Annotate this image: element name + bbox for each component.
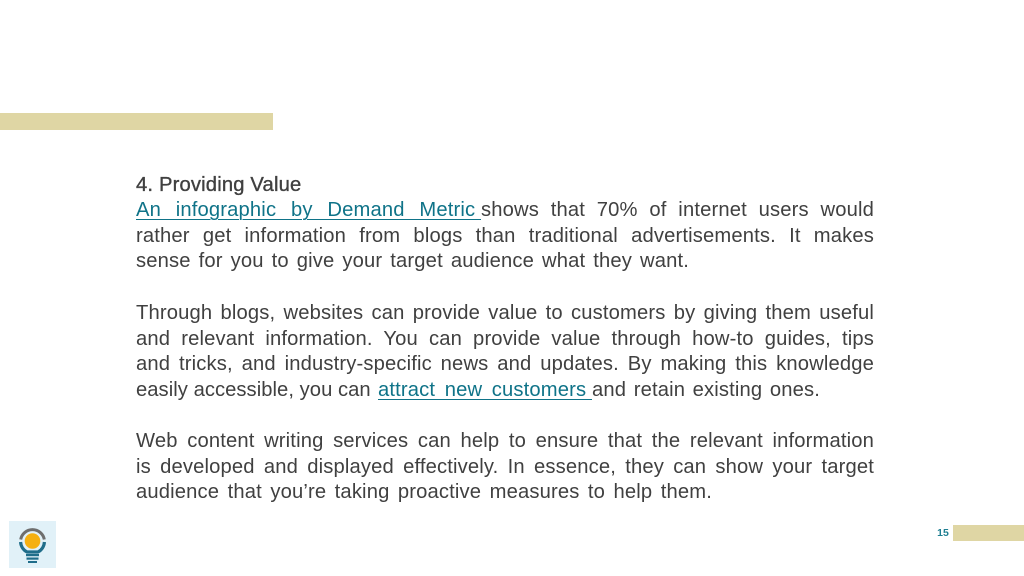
bottom right accent bar: [953, 525, 1024, 541]
paragraph 2: and relevant information. You can provide value through how-to guides, tips: [136, 328, 874, 350]
paragraph 1: An infographic by Demand Metric: [136, 199, 475, 221]
paragraph 2: and retain existing ones.: [592, 379, 820, 401]
page number: 15: [937, 527, 949, 539]
paragraph 1: rather get information from blogs than traditional advertisements. It makes: [136, 225, 874, 247]
paragraph 2: [136, 302, 874, 401]
paragraph 1: shows that 70% of internet users would: [481, 199, 874, 221]
paragraph 2: easily accessible, you can: [136, 379, 371, 401]
paragraph 1: [136, 199, 874, 272]
paragraph 3: [136, 430, 874, 503]
paragraph 3: Web content writing services can help to ensure that the relevant information: [136, 430, 874, 452]
paragraph 2: Through blogs, websites can provide value to customers by giving them useful: [136, 302, 874, 324]
paragraph 1: sense for you to give your target audience what they want.: [136, 250, 689, 272]
logo: light bulb icon: [9, 521, 56, 568]
heading: 4. Providing Value: [136, 174, 301, 196]
paragraph 2: and tricks, and industry-specific news and updates. By making this knowledge: [136, 353, 874, 375]
paragraph 2: attract new customers: [378, 379, 586, 401]
paragraph 3: is developed and displayed effectively. In essence, they can show your target: [136, 456, 874, 478]
paragraph 3: audience that you’re taking proactive measures to help them.: [136, 481, 712, 503]
top accent bar: [0, 113, 273, 130]
